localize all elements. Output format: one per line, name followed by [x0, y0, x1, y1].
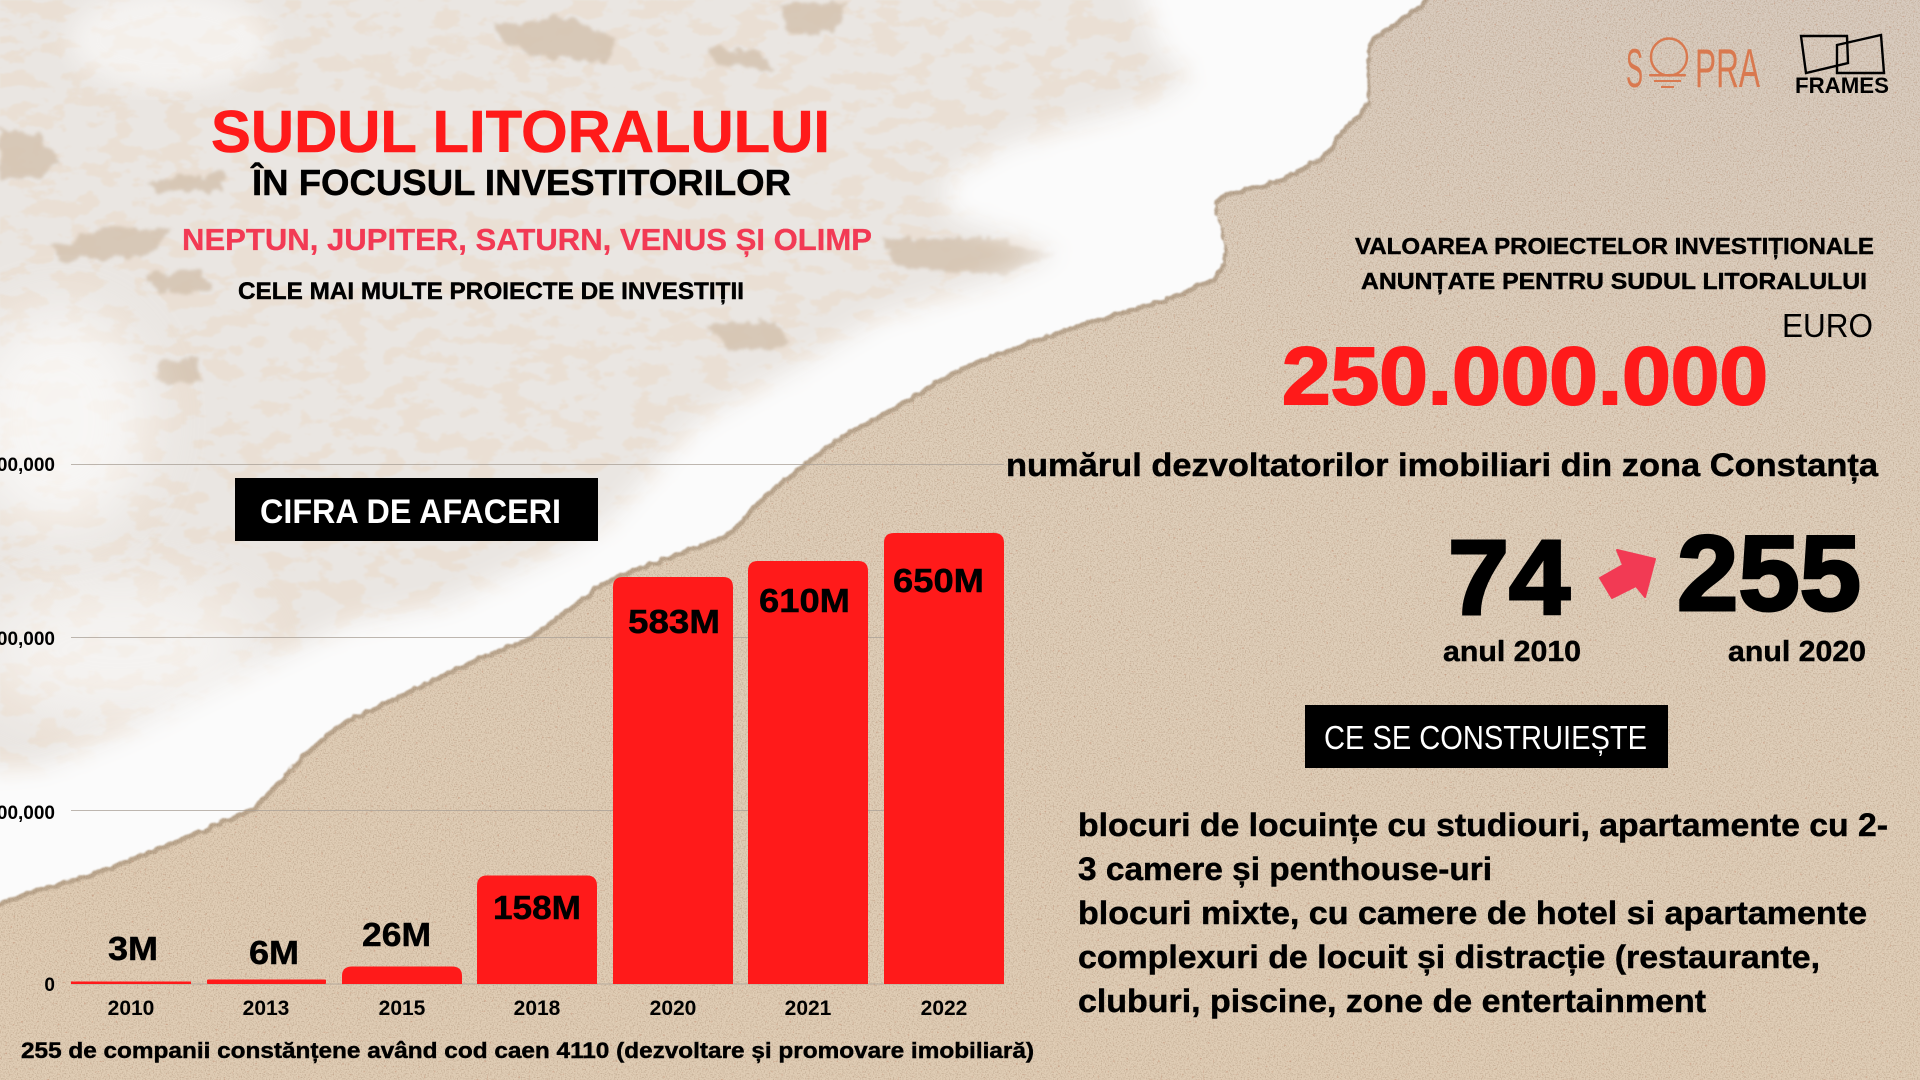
heading: cifra de afaceri [235, 478, 598, 541]
bar values: 26M [362, 916, 431, 953]
chart footnote: 255 de companii constănțene având cod caen 4110 (dezvoltare și promovare imobiliară) [21, 1038, 1034, 1063]
logo: Frames [1795, 35, 1889, 98]
axis labels: 2018 [514, 997, 561, 1020]
text block: what is being built: 3 camere și penthouse-uri [1078, 851, 1492, 887]
text block: what is being built: blocuri de locuințe cu studiouri, apartamente cu 2- [1078, 807, 1888, 843]
title: SUDUL LITORALULUI [211, 99, 830, 165]
axis labels: 2013 [243, 997, 289, 1020]
stat: 255 in 2020: 255 [1677, 513, 1861, 633]
stat: 74 in 2010: anul 2010 [1443, 636, 1581, 668]
logo: Sopra: S [1626, 37, 1643, 99]
text block: what is being built: blocuri mixte, cu camere de hotel si apartamente [1078, 895, 1867, 931]
subtitle: ÎN FOCUSUL INVESTITORILOR [250, 161, 791, 203]
axis labels: 2022 [921, 997, 967, 1020]
currency label: EURO [1782, 307, 1873, 344]
text block: what is being built: cluburi, piscine, zone de entertainment [1078, 983, 1706, 1019]
bar values: 6M [249, 934, 299, 971]
logo: Frames: FRAMES [1795, 73, 1889, 98]
arrow [1600, 550, 1655, 598]
developers heading: numărul dezvoltatorilor imobiliari din zona Constanța [1006, 447, 1878, 483]
axis labels: 2010 [108, 997, 154, 1020]
heading: ce se construiește [1305, 705, 1668, 768]
bar values: 158M [493, 889, 581, 926]
bar values: 3M [108, 930, 158, 967]
resort list: NEPTUN, JUPITER, SATURN, VENUS ȘI OLIMP [182, 222, 872, 257]
heading: cifra de afaceri: CIFRA DE AFACERI [260, 493, 561, 531]
bars [71, 533, 1004, 984]
bar values [108, 562, 984, 971]
tagline: CELE MAI MULTE PROIECTE DE INVESTIȚII [238, 278, 744, 305]
axis labels: 2020 [650, 997, 696, 1020]
text block: what is being built: complexuri de locuit și distracție (restaurante, [1078, 939, 1820, 975]
investment value heading: ANUNȚATE PENTRU SUDUL LITORALULUI [1361, 268, 1867, 294]
axis labels: 2015 [379, 997, 426, 1020]
axis labels [0, 455, 967, 1020]
bar values: 610M [759, 582, 850, 619]
heading: ce se construiește: CE SE CONSTRUIEȘTE [1324, 719, 1647, 756]
axis labels: 0 [44, 975, 55, 996]
bar values: 650M [893, 562, 984, 599]
big number: investment value: 250.000.000 [1282, 331, 1768, 422]
stat: 255 in 2020: anul 2020 [1728, 636, 1866, 668]
investment value heading: VALOAREA PROIECTELOR INVESTIȚIONALE [1355, 233, 1874, 259]
logo: Sopra [1626, 37, 1760, 99]
bar chart: cifra de afaceri [0, 455, 1004, 1020]
stat: 74 in 2010: 74 [1448, 519, 1570, 637]
investment value heading [1355, 233, 1874, 294]
axis labels: 2021 [785, 997, 832, 1020]
stat: 74 in 2010 [1443, 519, 1581, 668]
text block: what is being built [1078, 807, 1888, 1019]
bar values: 583M [628, 603, 720, 640]
logo: Sopra: PRA [1695, 37, 1760, 99]
